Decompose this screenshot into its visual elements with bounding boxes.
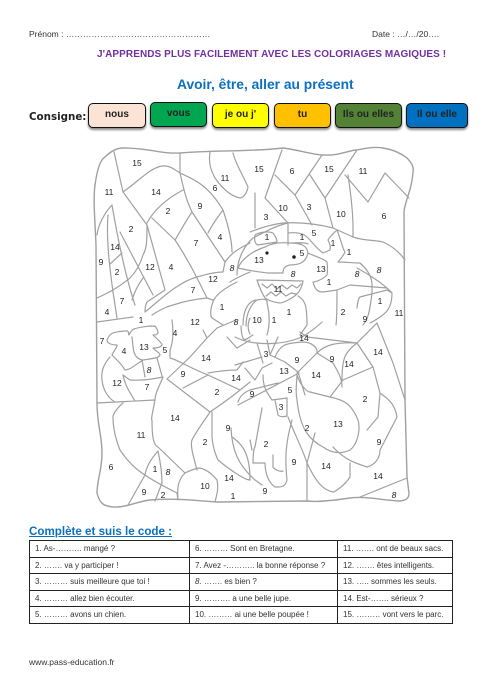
number labels: 13 <box>139 342 149 352</box>
key: vous <box>150 102 207 127</box>
colour key <box>86 102 470 132</box>
number labels: 11 <box>105 187 114 197</box>
key: ils ou elles: Ils ou elles <box>343 109 394 120</box>
number labels: 9 <box>250 389 255 399</box>
number labels: 9 <box>330 354 335 364</box>
number labels: 14 <box>321 461 331 471</box>
exercise table: 2. ……. va y participer ! <box>35 561 119 570</box>
number labels: 1 <box>153 464 158 474</box>
number labels: 6 <box>213 183 218 193</box>
number labels: 3 <box>307 202 312 212</box>
number labels: 9 <box>181 369 186 379</box>
website footer: www.pass-education.fr <box>29 657 115 667</box>
number labels: 15 <box>254 164 264 174</box>
exercise table: 3. ……… suis meilleure que toi ! <box>35 577 150 586</box>
key: nous: nous <box>105 109 129 120</box>
number labels: 8 <box>291 269 296 279</box>
number labels: 2 <box>215 387 220 397</box>
number labels: 14 <box>224 473 234 483</box>
exercise table <box>29 540 453 624</box>
number labels: 4 <box>169 262 174 272</box>
number labels: 13 <box>254 255 264 265</box>
key: vous: vous <box>167 108 190 119</box>
date field: Date : …/…/20…. <box>372 29 439 39</box>
exercise table: 8. ……. es bien ? <box>195 577 257 586</box>
number labels: 14 <box>151 187 161 197</box>
number labels: 2 <box>305 423 310 433</box>
number labels: 1 <box>272 315 277 325</box>
number labels: 14 <box>311 370 321 380</box>
number labels: 1 <box>287 307 292 317</box>
number labels: 2 <box>161 490 166 500</box>
subtitle: Avoir, être, aller au présent <box>177 77 354 92</box>
instruction label: Consigne: <box>29 111 86 123</box>
number labels: 14 <box>299 333 309 343</box>
number labels: 12 <box>190 317 200 327</box>
number labels: 13 <box>333 419 343 429</box>
key: tu: tu <box>298 109 307 120</box>
number labels: 11 <box>221 173 230 183</box>
number labels: 7 <box>191 285 196 295</box>
number labels: 1 <box>139 315 144 325</box>
number labels: 3 <box>264 349 269 359</box>
number labels: 11 <box>274 284 283 294</box>
key: il ou elle <box>406 103 468 128</box>
key: ils ou elles <box>335 103 402 128</box>
key: il ou elle: Il ou elle <box>417 109 457 120</box>
exercise table: 10. ……… ai une belle poupée ! <box>195 610 309 619</box>
exercise table: 4. ……… allez bien écouter. <box>35 594 135 603</box>
number labels: 6 <box>290 166 295 176</box>
number labels: 14 <box>170 413 180 423</box>
number labels: 14 <box>344 359 354 369</box>
number labels: 8 <box>230 263 235 273</box>
exercise table: 9. ………. a une belle jupe. <box>195 594 291 603</box>
key: je ou j' <box>212 103 269 128</box>
number labels: 12 <box>145 262 155 272</box>
number labels: 5 <box>312 228 317 238</box>
number labels: 14 <box>373 347 383 357</box>
number labels: 5 <box>288 385 293 395</box>
number labels: 14 <box>110 242 120 252</box>
number labels: 12 <box>208 274 218 284</box>
key: tu <box>274 103 331 128</box>
number labels: 9 <box>292 457 297 467</box>
exercise table: 12. ……. êtes intelligents. <box>343 561 434 570</box>
number labels: 2 <box>129 224 134 234</box>
number labels: 1 <box>347 247 352 257</box>
number labels: 3 <box>264 212 269 222</box>
exercise table: 11. ……. ont de beaux sacs. <box>343 544 443 553</box>
number labels: 7 <box>100 336 105 346</box>
number labels: 1 <box>231 491 236 501</box>
number labels: 13 <box>279 366 289 376</box>
mouth <box>257 280 303 303</box>
number labels: 15 <box>324 164 334 174</box>
exercise table: 14. Est-……. sérieux ? <box>343 594 423 603</box>
number labels: 3 <box>279 402 284 412</box>
number labels: 9 <box>198 201 203 211</box>
number labels: 4 <box>218 232 223 242</box>
number labels: 8 <box>147 365 152 375</box>
exercise table: 7. Avez -……….. la bonne réponse ? <box>195 561 325 570</box>
number labels: 4 <box>173 328 178 338</box>
number labels: 5 <box>163 345 168 355</box>
key: je ou j': je ou j' <box>225 109 256 120</box>
number labels: 10 <box>252 315 262 325</box>
number labels: 9 <box>263 486 268 496</box>
number labels: 7 <box>194 238 199 248</box>
number labels: 6 <box>382 211 387 221</box>
number labels: 8 <box>166 467 171 477</box>
exercise heading: Complète et suis le code : <box>29 525 172 538</box>
number labels: 2 <box>264 439 269 449</box>
number labels: 13 <box>316 264 326 274</box>
number labels: 5 <box>300 248 305 258</box>
number labels: 8 <box>377 265 382 275</box>
number labels: 1 <box>265 232 270 242</box>
number labels: 9 <box>377 437 382 447</box>
picture line art <box>94 147 413 507</box>
key: nous <box>88 103 146 128</box>
number labels: 8 <box>392 490 397 500</box>
exercise table: 1. As-………. mangé ? <box>35 544 115 553</box>
number labels: 6 <box>109 462 114 472</box>
number labels: 9 <box>295 355 300 365</box>
exercise table: 5. ……… avons un chien. <box>35 610 126 619</box>
number labels: 1 <box>378 296 383 306</box>
number labels: 12 <box>112 378 122 388</box>
number labels: 2 <box>341 307 346 317</box>
number labels: 2 <box>115 267 120 277</box>
number labels: 8 <box>234 317 239 327</box>
exercise table: 6. ……… Sont en Bretagne. <box>195 544 295 553</box>
number labels: 9 <box>363 314 368 324</box>
number labels: 2 <box>363 394 368 404</box>
number labels: 9 <box>142 487 147 497</box>
number labels: 2 <box>166 206 171 216</box>
main heading: J'APPRENDS PLUS FACILEMENT AVEC LES COLORIAGES MAGIQUES ! <box>97 49 446 60</box>
number labels: 1 <box>300 232 305 242</box>
number labels: 15 <box>132 158 142 168</box>
number labels: 7 <box>145 382 150 392</box>
number labels: 2 <box>203 437 208 447</box>
number labels: 9 <box>99 257 104 267</box>
number labels: 11 <box>395 308 404 318</box>
number labels: 11 <box>137 430 146 440</box>
number labels: 11 <box>359 166 368 176</box>
hand <box>107 326 163 400</box>
number labels: 10 <box>336 209 346 219</box>
eye dots <box>265 251 296 259</box>
number labels: 9 <box>226 423 231 433</box>
number labels: 4 <box>122 346 127 356</box>
number labels: 7 <box>120 296 125 306</box>
number labels: 4 <box>105 307 110 317</box>
number labels: 10 <box>200 481 210 491</box>
number labels: 14 <box>201 353 211 363</box>
student name field: Prénom : …………………………………………… <box>29 29 210 39</box>
number labels <box>99 158 404 501</box>
number labels: 1 <box>331 238 336 248</box>
number labels: 14 <box>231 373 241 383</box>
exercise table: 13. ….. sommes les seuls. <box>343 577 437 586</box>
number labels: 1 <box>220 302 225 312</box>
number labels: 8 <box>355 269 360 279</box>
number labels: 1 <box>327 277 332 287</box>
number labels: 14 <box>373 471 383 481</box>
bow tie and collar <box>235 322 322 417</box>
exercise table: 15. ……… vont vers le parc. <box>343 610 443 619</box>
number labels: 10 <box>278 203 288 213</box>
